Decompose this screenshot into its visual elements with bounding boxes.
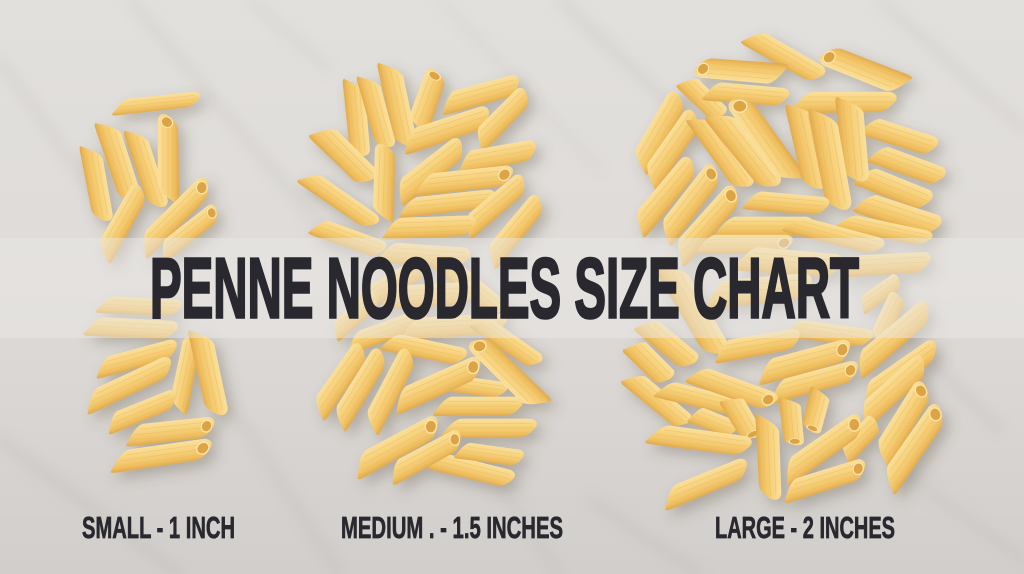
pasta pile: small — [79, 91, 229, 473]
pasta pile: large — [620, 25, 951, 511]
label: small size: SMALL - 1 INCH — [82, 510, 235, 545]
pasta pile: medium — [296, 58, 552, 490]
translucent title band — [0, 238, 1024, 338]
label: large size: LARGE - 2 INCHES — [715, 510, 895, 545]
label: medium size: MEDIUM . - 1.5 INCHES — [341, 510, 563, 545]
